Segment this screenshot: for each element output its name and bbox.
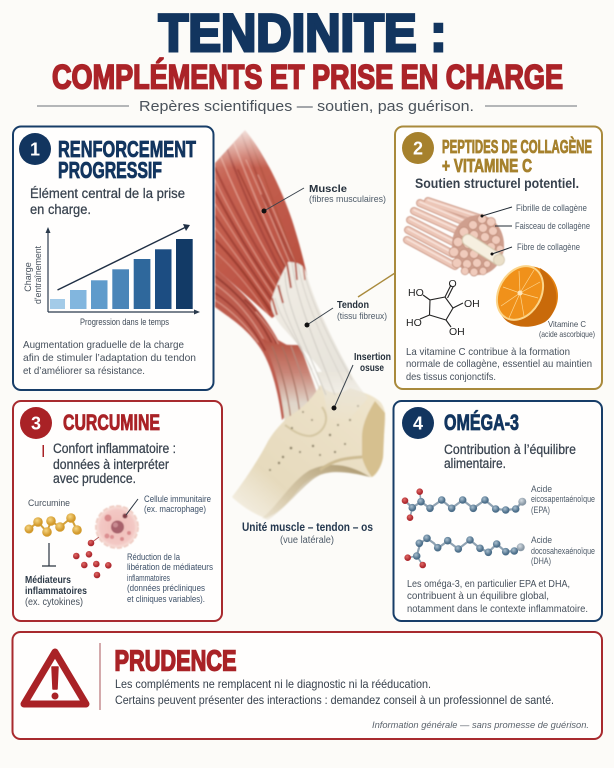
ascorbic acid molecule: HO: [406, 317, 422, 329]
badge 4: [402, 407, 434, 439]
reduction note: libération de médiateurs: [127, 562, 213, 572]
leader: tendon: Tendon: [337, 300, 369, 311]
panel 4: oméga-3: [394, 401, 602, 621]
ascorbic acid molecule: O: [448, 278, 457, 290]
warning icon: [24, 652, 86, 704]
panel 3: curcumine: [13, 401, 222, 621]
subheading 3: [42, 441, 176, 486]
badge 3: [20, 407, 52, 439]
leader: insertion osseuse: Insertion: [354, 352, 391, 363]
collagen bundle illustration: [407, 200, 504, 276]
heading 4: OMÉGA-3: [444, 410, 519, 435]
EPA label: Acide: [531, 484, 552, 494]
leader: tendon: [304, 300, 387, 328]
bone: [232, 385, 385, 520]
anatomy caption: [242, 522, 373, 546]
subheading 1: en charge.: [30, 202, 91, 217]
ascorbic acid molecule: HO: [408, 287, 424, 299]
vitamin C label: (acide ascorbique): [539, 329, 595, 339]
immune cell: [96, 506, 138, 548]
EPA molecule: [402, 488, 526, 521]
EPA label: [531, 484, 595, 515]
footnote: Information générale — sans promesse de guérison.: [372, 720, 589, 731]
x axis label: Progression dans le temps: [80, 317, 169, 327]
mediators label: [25, 574, 87, 608]
divider: [99, 643, 101, 710]
y axis label: d'entraînement: [33, 246, 43, 304]
subheading 3: données à interpréter: [53, 457, 169, 472]
connector: collagen panel to tendon: [358, 273, 395, 297]
DHA label: Acide: [531, 535, 552, 545]
body 1: afin de stimuler l’adaptation du tendon: [23, 352, 196, 364]
badge 4: 4: [413, 414, 423, 434]
leader: muscle: [262, 184, 386, 214]
ascorbic acid molecule: OH: [449, 326, 465, 338]
EPA label: eicosapentaénoïque: [531, 494, 595, 504]
subheading 4: alimentaire.: [444, 456, 506, 471]
reduction note: Réduction de la: [127, 552, 180, 562]
mediators label: Médiateurs: [25, 574, 71, 586]
DHA label: (DHA): [531, 556, 551, 566]
y axis label: Charge: [23, 262, 33, 292]
main tendon: [270, 260, 365, 408]
body 4: Les oméga-3, en particulier EPA et DHA,: [407, 578, 570, 590]
subheading 3: Confort inflammatoire :: [53, 441, 176, 456]
prudence text: [115, 677, 554, 707]
curcumin molecule: Curcumine: [28, 498, 70, 509]
released mediators: [73, 537, 112, 578]
curcumin molecule: [24, 498, 82, 537]
DHA label: docosahexaénoïque: [531, 546, 595, 556]
vitamin C label: [539, 319, 595, 339]
immune cell label: Cellule immunitaire: [144, 494, 211, 504]
badge 2: [402, 132, 434, 164]
body 1: [23, 339, 196, 377]
anatomy caption: Unité muscle – tendon – os: [242, 522, 373, 534]
prudence text: Les compléments ne remplacent ni le diagnostic ni la rééducation.: [115, 677, 431, 691]
leader: tendon: (tissu fibreux): [337, 311, 387, 321]
body 2: normale de collagène, essentiel au maintien: [406, 358, 592, 370]
heading prudence: PRUDENCE: [114, 646, 236, 678]
DHA molecule: [404, 534, 525, 568]
reduction note: et cliniques variables).: [127, 594, 205, 604]
mediators label: (ex. cytokines): [25, 597, 83, 608]
leader: insertion osseuse: [332, 352, 391, 410]
subheading 1: [30, 186, 185, 217]
bar chart: [23, 224, 200, 327]
body 2: [406, 346, 592, 383]
badge 1: 1: [30, 140, 40, 160]
reduction note: inflammatoires: [127, 573, 170, 583]
body 4: [407, 578, 588, 615]
upper muscle: [212, 125, 307, 318]
title: [37, 4, 577, 115]
lower muscle: [215, 268, 322, 425]
heading 1: [58, 136, 196, 183]
subheading 4: [444, 442, 576, 471]
orange half: [486, 256, 558, 330]
leader: muscle: (fibres musculaires): [309, 194, 386, 204]
subheading 4: Contribution à l’équilibre: [444, 442, 576, 457]
reduction note: [127, 552, 213, 604]
badge 1: [19, 133, 51, 165]
EPA label: (EPA): [531, 505, 550, 515]
body 4: notamment dans le contexte inflammatoire.: [407, 603, 588, 615]
heading 2: [442, 136, 592, 176]
body 4: contribuent à un équilibre global,: [407, 590, 549, 602]
subheading 2: Soutien structurel potentiel.: [415, 176, 579, 191]
panel: prudence: [12, 632, 602, 739]
central anatomy illustration: [212, 125, 391, 546]
mediators label: inflammatoires: [25, 585, 87, 597]
top fade of muscle: [212, 125, 270, 168]
second tendon strip: [262, 338, 322, 425]
collagen labels: [480, 203, 590, 256]
leader: insertion osseuse: osuse: [360, 363, 384, 374]
collagen labels: Fibre de collagène: [517, 242, 580, 252]
collagen labels: Faisceau de collagène: [515, 221, 590, 231]
body 1: Augmentation graduelle de la charge: [23, 339, 184, 351]
body 2: des tissus conjonctifs.: [406, 371, 496, 383]
ascorbic acid molecule: [406, 278, 480, 338]
prudence text: Certains peuvent présenter des interactions : demandez conseil à un professionnel de santé.: [115, 693, 554, 707]
heading 3: CURCUMINE: [63, 410, 160, 435]
central fibre: [468, 240, 504, 266]
heading 1: PROGRESSIF: [58, 157, 162, 183]
body 1: et d’améliorer sa résistance.: [23, 365, 145, 377]
immune cell label: [126, 494, 211, 515]
y axis label: [23, 246, 43, 304]
inhibition symbol: [42, 543, 56, 566]
subtitle: Repères scientifiques — soutien, pas guérison.: [139, 98, 474, 115]
ascorbic acid molecule: OH: [464, 298, 480, 310]
badge 3: 3: [31, 414, 41, 434]
badge 2: 2: [413, 138, 423, 158]
leader: muscle: Muscle: [309, 184, 347, 195]
immune cell label: (ex. macrophage): [144, 504, 206, 514]
reduction note: (données précliniques: [127, 583, 205, 593]
anatomy caption: (vue latérale): [280, 535, 334, 546]
title line 1: TENDINITE :: [158, 4, 446, 63]
collagen labels: Fibrille de collagène: [516, 203, 587, 213]
body 2: La vitamine C contribue à la formation: [406, 346, 570, 358]
subheading 1: Élément central de la prise: [30, 186, 185, 201]
trend arrow: [58, 224, 190, 290]
panel 1: renforcement progressif: [13, 126, 214, 390]
heading 2: + VITAMINE C: [442, 156, 532, 176]
vitamin C label: Vitamine C: [548, 319, 586, 329]
heading 1: RENFORCEMENT: [58, 136, 196, 162]
DHA label: [531, 535, 595, 566]
subheading 3: avec prudence.: [53, 471, 136, 486]
panel 2: peptides de collagène: [395, 126, 602, 389]
